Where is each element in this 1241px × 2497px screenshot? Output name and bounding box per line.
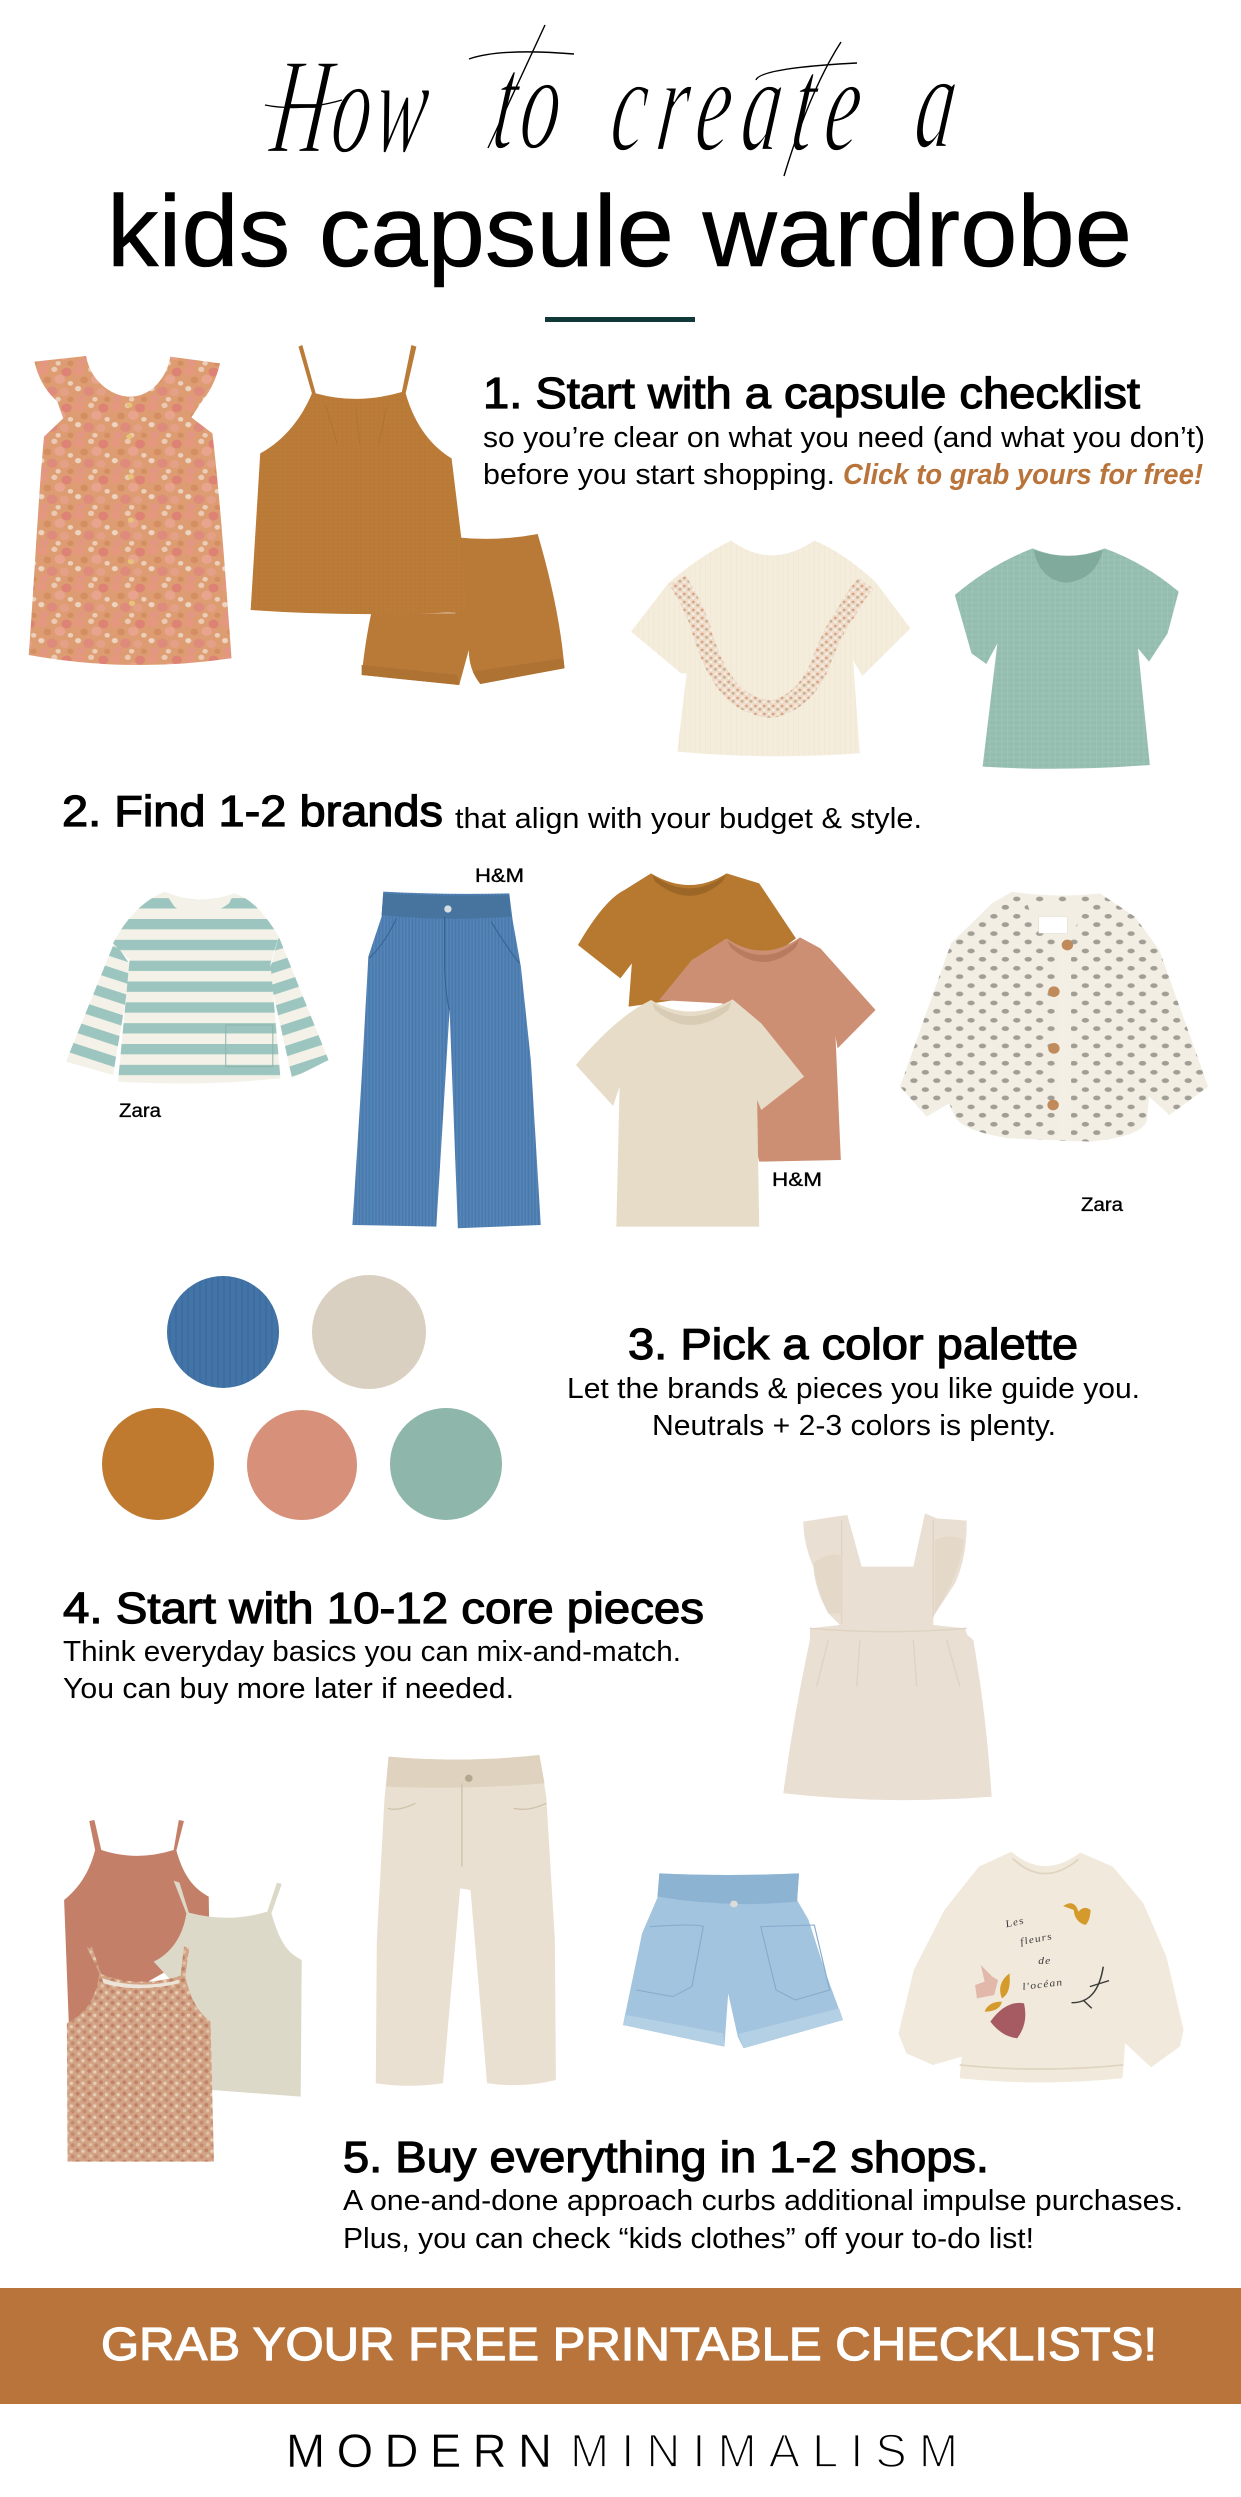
brand label: Zara sweater: Zara	[119, 1101, 161, 1122]
step 2 text: that align with your budget & style.	[455, 803, 922, 835]
stack of camisoles	[64, 1820, 302, 2162]
script line: How to create a	[263, 25, 966, 183]
step 5 text: Plus, you can check “kids clothes” off your to-do list!	[343, 2223, 1034, 2255]
script line: How to create a: to	[486, 27, 571, 179]
swatch: denim	[167, 1276, 279, 1388]
footer logo	[286, 2424, 958, 2477]
sweatshirt print wording: de	[1038, 1956, 1051, 1967]
step 3 text	[567, 1373, 1140, 1442]
main title line: kids capsule wardrobe	[107, 176, 1132, 288]
footer logo: MINIMALISM	[570, 2424, 958, 2477]
step 1 text: Click to grab yours for free!	[843, 459, 1203, 491]
swatch: beige	[312, 1275, 426, 1389]
floral dress	[29, 356, 232, 665]
ochre tank and shorts	[251, 345, 564, 685]
panel: step 2	[62, 787, 1208, 1228]
brand label: H&M jeans: H&M	[475, 866, 524, 887]
brand label: Zara jacket: Zara	[1081, 1195, 1123, 1216]
panel: step 5	[343, 2133, 1183, 2255]
script line: How to create a: How	[263, 31, 438, 183]
swatch: teal	[390, 1408, 502, 1520]
stack of tees	[576, 873, 876, 1227]
step 1 text: before you start shopping.	[483, 459, 835, 491]
cream printed sweatshirt	[899, 1852, 1184, 2082]
step 4 heading: 4. Start with 10-12 core pieces	[63, 1584, 704, 1633]
step 5 text: A one-and-done approach curbs additional impulse purchases.	[343, 2185, 1183, 2217]
sweatshirt print motifs	[975, 1903, 1109, 2038]
step 1 heading: 1. Start with a capsule checklist	[483, 369, 1140, 418]
step 3 text: Let the brands & pieces you like guide you.	[567, 1373, 1140, 1405]
call-to-action banner: GRAB YOUR FREE PRINTABLE CHECKLISTS!	[101, 2318, 1157, 2370]
step 4 text	[63, 1636, 681, 1705]
step 4 text: Think everyday basics you can mix-and-match.	[63, 1636, 681, 1668]
script line: How to create a: create	[604, 29, 871, 181]
panel: step 1	[29, 345, 1205, 769]
panel: step 4	[63, 1513, 1184, 2162]
swatch: ochre	[102, 1408, 214, 1520]
sweatshirt print wording: l'océan	[1022, 1977, 1064, 1993]
script line: How to create a: a	[908, 26, 966, 178]
sweatshirt print wording	[1003, 1915, 1064, 1993]
striped sweater	[66, 892, 329, 1084]
step 2 heading: 2. Find 1-2 brands	[62, 787, 443, 836]
brand label: H&M tees: H&M	[772, 1170, 822, 1191]
decorative pen flourishes	[265, 25, 857, 176]
sweatshirt print wording: fleurs	[1019, 1931, 1054, 1948]
sweatshirt print wording: Les	[1003, 1915, 1026, 1930]
panel: step 3	[102, 1275, 1140, 1520]
cream paperbag pants	[376, 1755, 556, 2086]
beige pinafore dress	[783, 1513, 992, 1800]
step 4 text: You can buy more later if needed.	[63, 1673, 514, 1705]
footer logo: MODERN	[286, 2424, 552, 2477]
step 1 text	[483, 422, 1205, 491]
title	[107, 25, 1132, 288]
call-to-action banner	[0, 2288, 1241, 2404]
step 3 heading: 3. Pick a color palette	[628, 1320, 1078, 1369]
step 5 heading: 5. Buy everything in 1-2 shops.	[343, 2133, 989, 2182]
step 5 text	[343, 2185, 1183, 2255]
cream frill top	[631, 541, 910, 756]
denim shorts	[623, 1873, 843, 2048]
teal tee	[955, 548, 1179, 769]
step 1 text: so you’re clear on what you need (and what you don’t)	[483, 422, 1205, 454]
blue jeans	[352, 892, 541, 1228]
floral jacket	[900, 892, 1208, 1142]
colour palette swatches	[102, 1275, 502, 1520]
step 3 text: Neutrals + 2-3 colors is plenty.	[652, 1410, 1056, 1442]
swatch: salmon	[247, 1410, 357, 1520]
